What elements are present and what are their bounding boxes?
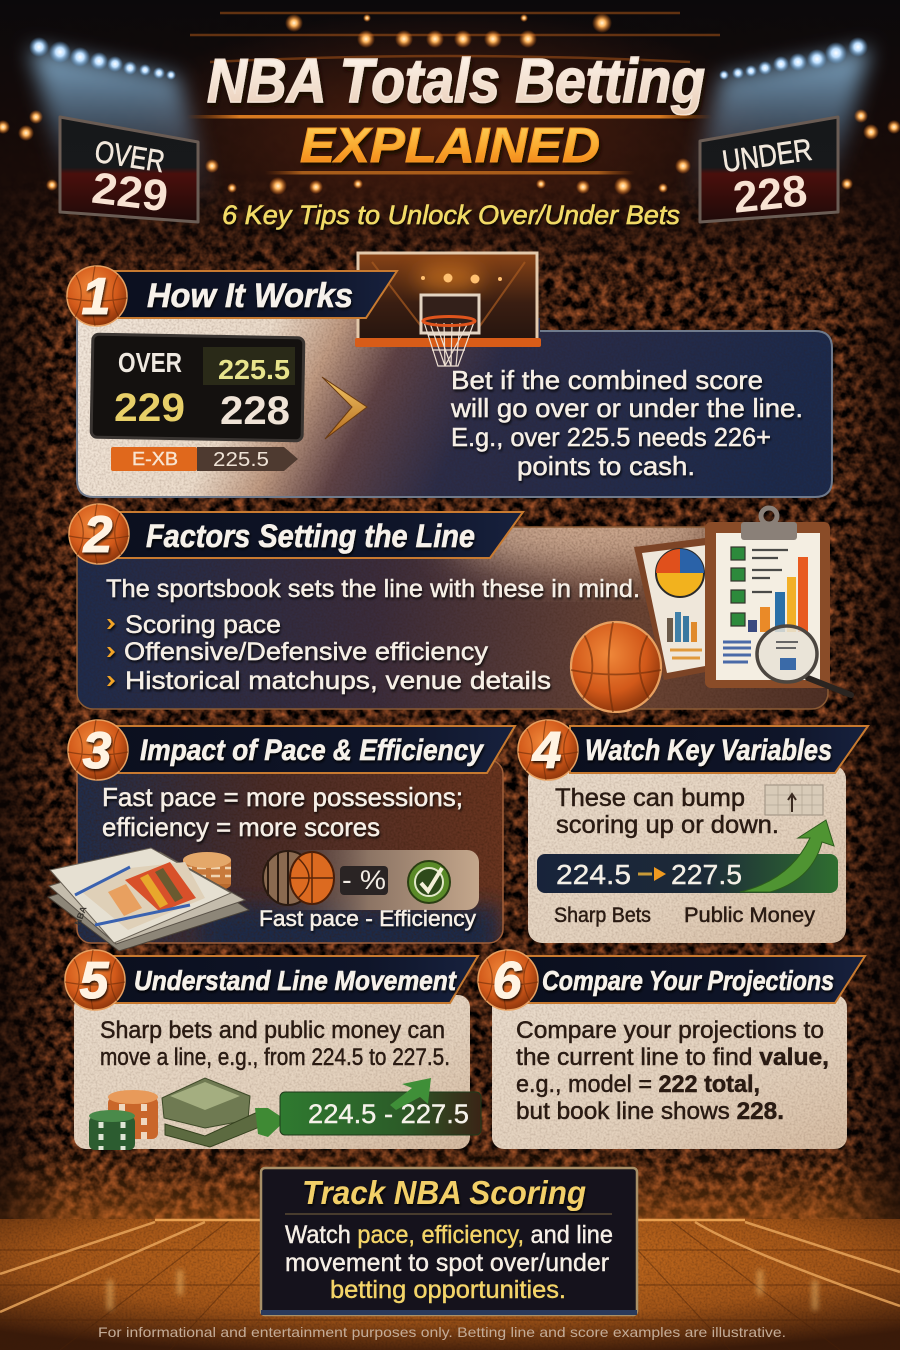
icon: mini chart sheet — [765, 785, 823, 815]
panel 1: how it works — [77, 253, 832, 497]
icon: rear chart clipboard — [634, 537, 716, 680]
mini scoreboard — [91, 334, 304, 441]
scoreboard: over 229: OVER — [92, 134, 167, 179]
cta text — [285, 1221, 613, 1304]
cta text: Watch pace, efficiency, and line — [285, 1221, 613, 1249]
green line box: 224.5 - 227.5 — [308, 1099, 469, 1129]
header 4: Watch Key Variables — [585, 734, 832, 767]
mini scoreboard: 229 — [114, 386, 185, 430]
panel 6: compare your projections — [492, 995, 847, 1149]
line tag: 225.5 — [213, 449, 269, 471]
line movement bar: 224.5 — [556, 859, 631, 890]
header 2: Factors Setting the Line — [146, 518, 475, 554]
header 3: Impact of Pace & Efficiency — [140, 734, 484, 767]
mini scoreboard: OVER — [118, 347, 182, 378]
green line box — [280, 1092, 481, 1135]
cta text: betting opportunities. — [330, 1276, 566, 1304]
arrow: chevron — [322, 377, 367, 439]
scoreboard: under 228 — [700, 117, 838, 223]
body text: These can bump — [555, 784, 745, 812]
icon strip — [258, 850, 479, 910]
icon: basketball — [571, 622, 661, 712]
icon: checklist clipboard — [705, 508, 830, 688]
bullet list: Offensive/Defensive efficiency — [124, 638, 489, 666]
scoreboard: over 229 — [60, 117, 198, 222]
icon: stack of reports: NBA — [72, 904, 89, 927]
bullet list: Historical matchups, venue details — [125, 667, 551, 695]
header 6: Compare Your Projections — [542, 965, 834, 996]
line tag — [111, 447, 298, 471]
panel 4: watch key variables: scoring up or down. — [556, 811, 779, 839]
call to action panel — [261, 1168, 637, 1315]
bullet list — [107, 611, 551, 695]
scoreboard: under 228: UNDER — [720, 132, 814, 179]
backboard and hoop — [355, 253, 541, 366]
header 3 — [68, 720, 515, 780]
body text: Compare your projections to — [516, 1017, 824, 1044]
lower title rule — [265, 171, 635, 174]
labels: Sharp Bets — [554, 904, 651, 927]
mini scoreboard: 225.5 — [218, 354, 290, 385]
tagline: 6 Key Tips to Unlock Over/Under Bets — [222, 200, 680, 230]
explanation text: Bet if the combined score — [451, 365, 763, 395]
explanation text: will go over or under the line. — [450, 393, 803, 423]
header 6 — [478, 950, 865, 1010]
panel 3: impact of pace and efficiency — [48, 760, 503, 965]
line tag: E-XB — [132, 449, 178, 469]
explanation text: points to cash. — [517, 451, 695, 481]
header 5 — [65, 950, 478, 1010]
cta text: movement to spot over/under — [285, 1249, 609, 1277]
header 2 — [69, 504, 523, 564]
intro text: The sportsbook sets the line with these in mind. — [106, 575, 640, 603]
explanation text: Fast pace = more possessions; — [102, 782, 463, 812]
header 5: 5 — [80, 952, 110, 1010]
mini scoreboard: 228 — [220, 389, 290, 433]
explanation text: efficiency = more scores — [102, 812, 380, 842]
icon strip: - % — [342, 865, 386, 895]
header 4: 4 — [532, 722, 562, 780]
scoreboard: under 228: 228 — [731, 166, 810, 223]
icon: chips — [183, 852, 231, 892]
arrow: green upward swoosh — [740, 820, 834, 892]
header 1 — [67, 266, 397, 326]
header 1: 1 — [82, 268, 110, 326]
header 5: Understand Line Movement — [134, 965, 457, 996]
icon: stack of reports — [48, 848, 249, 951]
body text: the current line to find value, — [516, 1044, 829, 1071]
header 1: How It Works — [147, 277, 353, 315]
line movement bar: 227.5 — [671, 859, 742, 890]
header 4 — [518, 720, 868, 780]
line movement bar — [537, 854, 838, 893]
main title: NBA Totals Betting — [207, 47, 705, 116]
cta heading: Track NBA Scoring — [302, 1174, 586, 1211]
icon: green chips — [89, 1110, 135, 1150]
bullet list: Scoring pace — [125, 611, 281, 639]
icon: magnifying glass — [757, 626, 851, 695]
header 2: 2 — [83, 506, 113, 564]
subtitle: explained: EXPLAINED — [300, 119, 600, 173]
body text — [516, 1017, 829, 1125]
panel 5: understand line movement — [74, 995, 481, 1150]
header 6: 6 — [493, 952, 523, 1010]
explanation text — [102, 782, 463, 842]
arrow: up trend — [390, 1078, 431, 1110]
arrow: to line box — [255, 1108, 286, 1137]
body text: e.g., model = 222 total, — [516, 1071, 760, 1098]
body text: Sharp bets and public money can — [100, 1017, 445, 1044]
icon: cash stacks — [162, 1078, 272, 1147]
scoreboard: over 229: 229 — [89, 164, 171, 221]
icon: orange chips — [108, 1090, 158, 1139]
panel 4: watch key variables — [528, 765, 846, 943]
explanation text: E.g., over 225.5 needs 226+ — [451, 422, 771, 452]
panel 2: factors setting the line — [77, 490, 851, 712]
labels — [554, 904, 816, 927]
title underline — [187, 115, 712, 118]
labels: Public Money — [684, 904, 816, 927]
caption: Fast pace - Efficiency — [259, 906, 476, 931]
body text: but book line shows 228. — [516, 1098, 784, 1125]
panel 5: understand line movement: move a line, e.g., from 224.5 to 227.5. — [100, 1044, 450, 1071]
explanation text — [450, 365, 803, 481]
header 3: 3 — [83, 722, 112, 780]
disclaimer: For informational and entertainment purposes only. Betting line and score examples are illustrative. — [98, 1324, 786, 1340]
